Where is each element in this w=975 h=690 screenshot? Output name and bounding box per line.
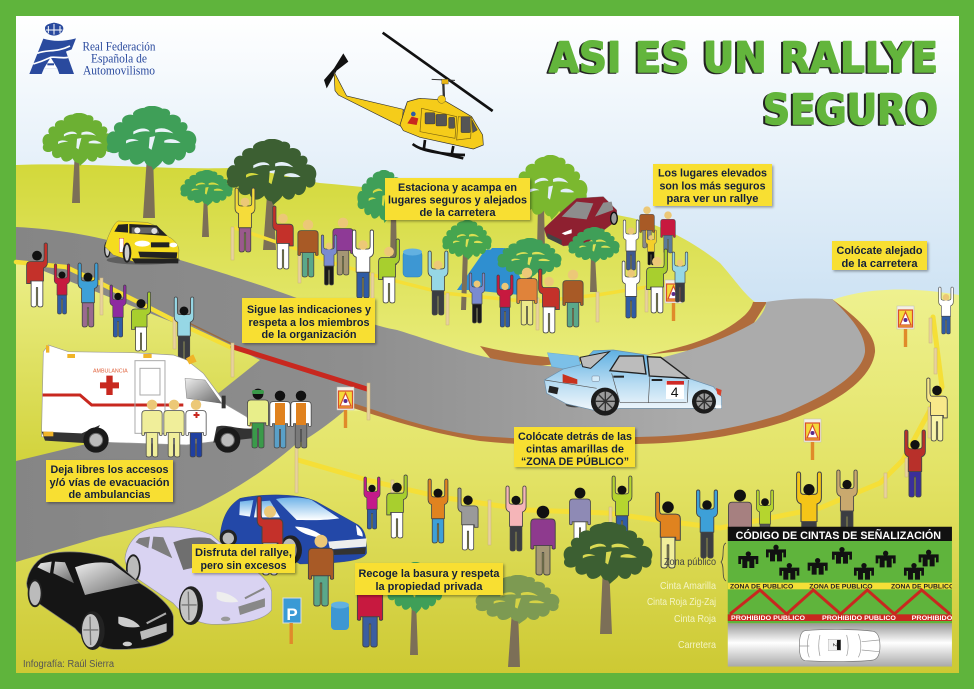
- verge between the two road branches: [16, 260, 260, 461]
- yellow tape: ZONA DE PUBLICO: [891, 583, 954, 590]
- legend labels: Cinta Roja: [674, 613, 716, 625]
- spectators: left of road: [27, 243, 194, 360]
- callout: ambulancias: Deja libres los accesos: [50, 464, 168, 476]
- fuselage: [400, 98, 483, 149]
- callout: recoge la basura: la propiedad privada: [376, 581, 483, 593]
- car top view: 2: [831, 643, 837, 647]
- legend labels: Zona público: [664, 556, 716, 568]
- callout: recoge la basura: [355, 563, 503, 595]
- callout: sigue las indicaciones: [242, 298, 375, 343]
- callout: lugares elevados: [653, 164, 772, 206]
- back hill: [16, 164, 775, 420]
- legend labels: [647, 543, 726, 651]
- legend labels: Cinta Roja Zig-Zaj: [647, 596, 716, 608]
- parking sign: [283, 598, 301, 644]
- red tape: PROHIBIDO PUBLICO: [731, 615, 805, 622]
- callout: cintas amarillas: “ZONA DE PÚBLICO”: [521, 455, 629, 468]
- callout: lugares elevados: son los más seguros: [660, 180, 766, 192]
- callout: ambulancias: y/ó vías de evacuación: [50, 477, 170, 489]
- parking sign: P: [286, 605, 298, 624]
- legend background: [728, 541, 952, 623]
- callout: cintas amarillas: Colócate detrás de las: [518, 431, 632, 443]
- credit: Infografía: Raúl Sierra: [23, 659, 114, 670]
- legend road: [728, 623, 952, 667]
- car: blue rally sedan number 4: 4: [671, 384, 679, 400]
- yellow tape: [728, 583, 954, 590]
- logo: Real Federación Española de Automovilismo: Automovilismo: [83, 62, 155, 78]
- ambulance: AMBULANCIA: [93, 368, 128, 374]
- panel: código de cintas de señalización: [728, 527, 954, 667]
- car: black hatchback: [27, 552, 173, 650]
- callout: estaciona y acampa: Estaciona y acampa en: [398, 182, 517, 194]
- callout: lugares elevados: Los lugares elevados: [658, 168, 767, 180]
- trees: middle of hill: [442, 220, 620, 310]
- tail boom: [334, 72, 403, 127]
- callout: ambulancias: de ambulancias: [68, 489, 150, 501]
- spectator on the hatchback: [257, 496, 283, 575]
- callout: estaciona y acampa: de la carretera: [420, 207, 496, 219]
- spectators: car park: [308, 535, 383, 647]
- car: lavender hatchback: [125, 527, 272, 625]
- tape posts: [100, 227, 937, 545]
- red zig-zag tape: [730, 590, 950, 614]
- legend labels: Cinta Amarilla: [660, 580, 716, 592]
- yellow tape: ZONA DE PUBLICO: [809, 583, 873, 590]
- road: [16, 227, 865, 562]
- barrel: front: [331, 602, 349, 630]
- icon: emblem: [29, 38, 76, 74]
- legend title bar: CÓDIGO DE CINTAS DE SEÑALIZACIÓN: [736, 529, 941, 542]
- car: yellow rally car: [104, 221, 180, 265]
- logo: Real Federación Española de Automovilismo: Española de: [91, 50, 147, 66]
- red tape: PROHIBIDO: [912, 615, 952, 622]
- title: ASI ES UN RALLYE: [549, 33, 938, 82]
- lower ground: [16, 290, 959, 673]
- callout: sigue las indicaciones: respeta a los miembros: [248, 317, 370, 329]
- callout: colócate alejado: Colócate alejado: [836, 245, 923, 257]
- ambulance: [42, 345, 253, 453]
- title: [549, 33, 938, 134]
- skids: [413, 140, 465, 158]
- warning tapes: [16, 228, 942, 528]
- trees: back row: [43, 106, 587, 265]
- road shoulders: [353, 299, 875, 446]
- warning signs: [337, 280, 914, 460]
- callout: disfruta: [192, 544, 295, 573]
- callout: disfruta: pero sin excesos: [200, 560, 286, 572]
- callout: sigue las indicaciones: Sigue las indicaciones y: [247, 304, 372, 316]
- yellow tape: ZONA DE PUBLICO: [730, 583, 793, 590]
- callout: ambulancias: [46, 460, 173, 502]
- barrel: back: [403, 248, 422, 277]
- mast: [440, 83, 447, 100]
- red tape: PROHIBIDO PUBLICO: [822, 615, 896, 622]
- callout: lugares elevados: para ver un rallye: [666, 193, 758, 205]
- callout: colócate alejado: [832, 241, 927, 270]
- car: blue hatchback: [220, 495, 367, 565]
- trees: foreground: [387, 522, 652, 667]
- callout: cintas amarillas: cintas amarillas de: [526, 444, 624, 456]
- tail rotor: [324, 53, 348, 88]
- callout: estaciona y acampa: [385, 178, 530, 220]
- car: blue rally sedan number 4: [544, 350, 722, 416]
- red tape: [728, 614, 952, 622]
- logo: Real Federación Española de Automovilismo: [29, 23, 156, 78]
- legend labels: Carretera: [678, 639, 716, 651]
- callout: recoge la basura: Recoge la basura y respeta: [358, 568, 500, 580]
- callout: estaciona y acampa: lugares seguros y alejados: [388, 194, 527, 206]
- medical staff and marshals: [142, 389, 311, 457]
- title: SEGURO: [763, 85, 938, 134]
- spectators: front row: [364, 378, 947, 575]
- car top view: [799, 629, 880, 662]
- callout: disfruta: Disfruta del rallye,: [195, 547, 292, 559]
- callout: sigue las indicaciones: de la organización: [262, 329, 357, 341]
- helicopter: [324, 33, 493, 158]
- callout: colócate alejado: de la carretera: [842, 258, 918, 270]
- callout: cintas amarillas: [514, 427, 635, 468]
- logo: Real Federación Española de Automovilismo: Real Federación: [82, 38, 156, 54]
- icon: crown: [45, 23, 63, 36]
- spectators: back hill: [235, 188, 953, 334]
- sky background: [16, 16, 959, 316]
- black public figures: [738, 545, 939, 580]
- car: red, parked on the hill: [544, 197, 617, 246]
- tent: [457, 248, 530, 296]
- main rotor: [383, 33, 493, 111]
